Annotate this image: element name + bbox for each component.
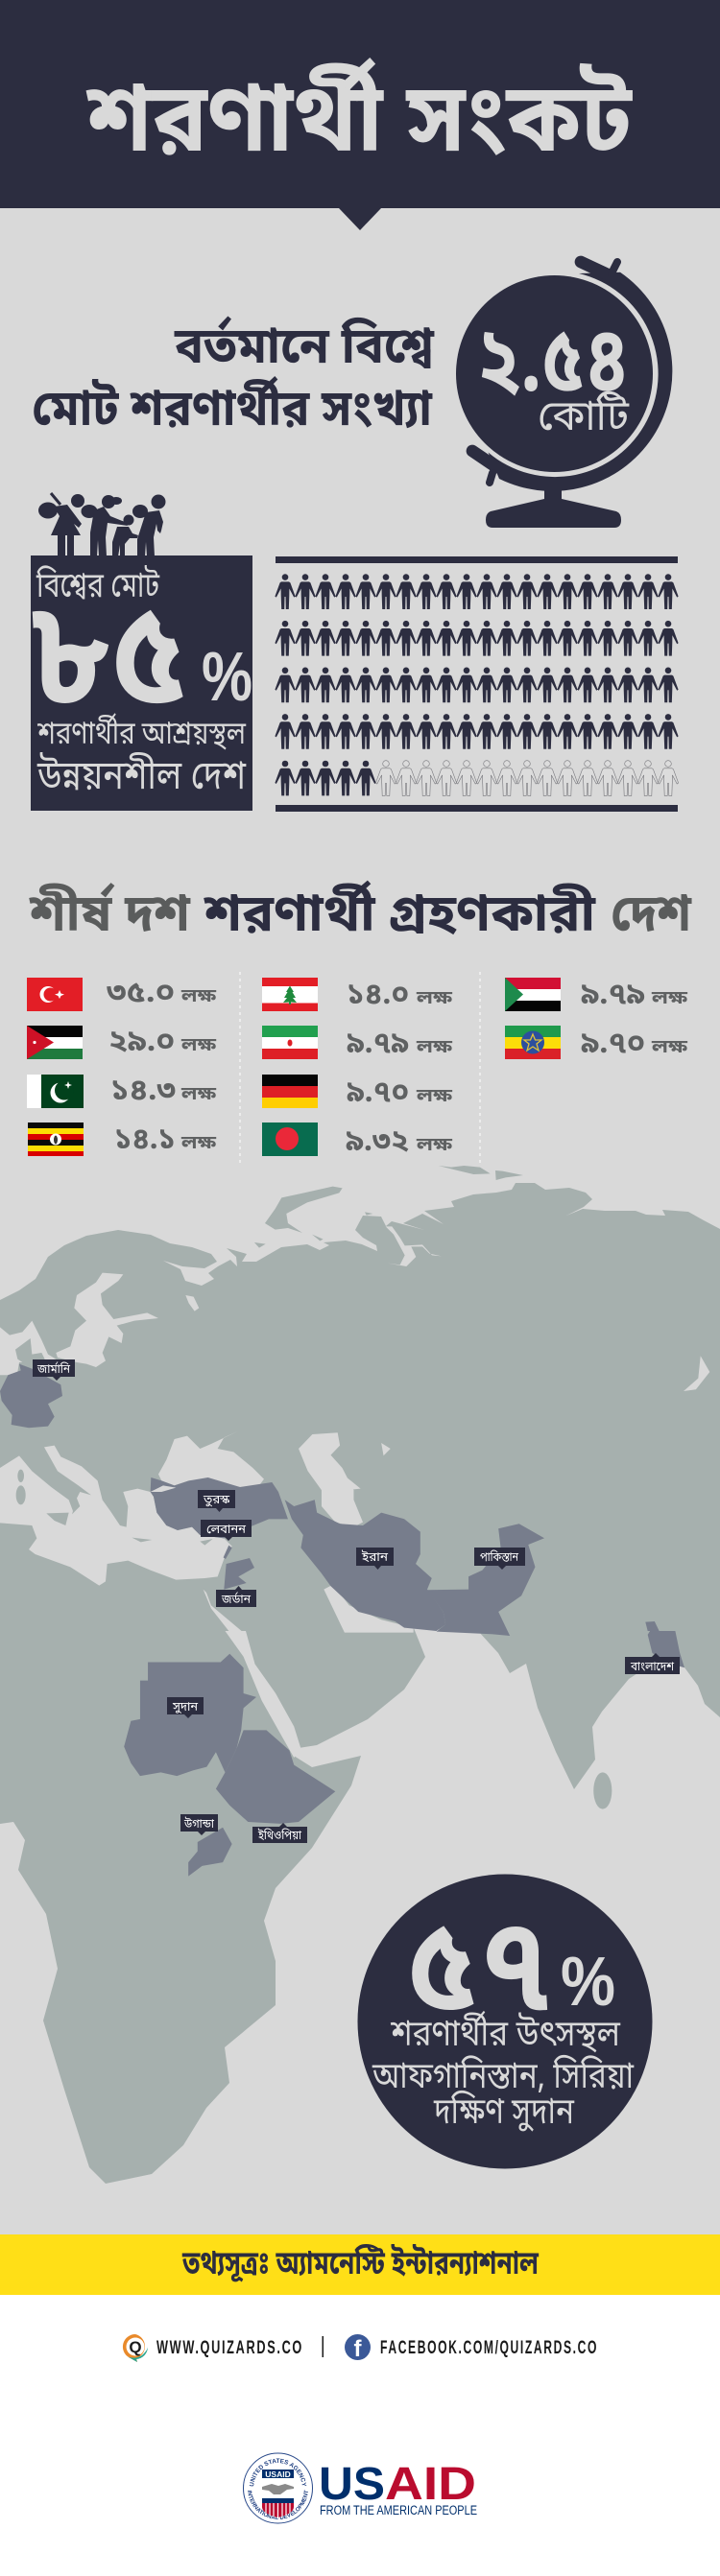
map label: Ethiopia [252, 1823, 307, 1845]
total figure: ২.৫৪ [477, 307, 629, 429]
USAID seal [243, 2452, 313, 2523]
flag: Ethiopia [505, 1026, 561, 1059]
map label: Iran: ইরান [361, 1549, 388, 1567]
facebook address: FACEBOOK.COM/QUIZARDS.CO [380, 2338, 598, 2358]
icon: Quizards logo [123, 2334, 148, 2362]
value: Turkey: ৩৫.০ [107, 975, 175, 1014]
value: Jordan: ২৯.০ [108, 1024, 175, 1063]
icon: Facebook [345, 2334, 371, 2362]
map label: Jordan: জর্ডান [221, 1592, 251, 1609]
map label: Pakistan [474, 1548, 525, 1570]
map label: Jordan [216, 1586, 256, 1609]
value: Turkey [107, 975, 217, 1014]
flag: Uganda [28, 1123, 84, 1156]
flag: Germany [262, 1075, 318, 1108]
value: Ethiopia [581, 1026, 688, 1065]
headline: total refugees: মোট শরণার্থীর সংখ্যা [32, 376, 433, 446]
icon: Facebook: f [353, 2336, 363, 2362]
source band [0, 2234, 720, 2295]
icon: Quizards logo: Q [129, 2338, 142, 2356]
value: Germany: ৯.৭০ [347, 1075, 409, 1114]
flag: Iran [262, 1026, 318, 1059]
pictogram row 5: outlined [375, 761, 679, 795]
map label: Germany: জার্মানি [36, 1361, 70, 1379]
USAID wordmark: AID [385, 2459, 476, 2510]
callout: 57 percent [357, 1875, 653, 2168]
value: Sudan: লক্ষ [651, 987, 688, 1011]
flag: Lebanon [262, 978, 318, 1011]
headline: total refugees [32, 317, 435, 446]
value: Germany: লক্ষ [416, 1085, 453, 1109]
value: Turkey: লক্ষ [180, 985, 217, 1009]
icon: refugee family [38, 493, 165, 556]
value: Iran: লক্ষ [416, 1036, 453, 1060]
map label: Bangladesh [625, 1653, 680, 1676]
map: Arctic islands east [365, 1166, 523, 1216]
value: Lebanon: ১৪.০ [347, 977, 409, 1016]
map label: Turkey: তুরস্ক [203, 1493, 230, 1509]
map: Baltic and North seas [0, 1273, 199, 1375]
header banner [0, 0, 720, 230]
map label: Germany [33, 1359, 75, 1381]
value: Pakistan: ১৪.৩ [110, 1073, 176, 1112]
value: Pakistan [110, 1073, 217, 1112]
pictogram row 1 [275, 574, 679, 609]
map label: Lebanon: লেবানন [206, 1523, 246, 1539]
value: Jordan [108, 1024, 217, 1063]
heading: top ten host countries: দেশ [611, 884, 692, 953]
map: Eurasia and Africa [0, 1166, 720, 2184]
pictogram row 2 [275, 621, 679, 656]
map: inland lakes [299, 1356, 709, 1633]
map label: Uganda [180, 1814, 218, 1835]
USAID seal: INTERNATIONAL DEVELOPMENT [248, 2490, 308, 2519]
icon: globe with total [456, 262, 672, 528]
icon: globe with total: কোটি [538, 390, 630, 447]
value: Iran [347, 1026, 453, 1065]
map: Mediterranean and Black seas [0, 1431, 264, 1631]
callout percent: % [561, 1944, 615, 2021]
heading: top ten host countries: শীর্ষ দশ [29, 883, 191, 953]
map label: Iran [356, 1548, 394, 1570]
map label: Sudan: সুদান [172, 1700, 198, 1716]
map label: Pakistan: পাকিস্তান [480, 1549, 518, 1567]
big figure: ৮৫ [32, 571, 188, 762]
title: শরণার্থী সংকট [85, 58, 633, 190]
map: Red Sea and Sri Lanka [225, 1631, 612, 1809]
value: Bangladesh: ৯.৩২ [346, 1123, 409, 1163]
headline: total refugees: বর্তমানে বিশ্বে [174, 317, 435, 384]
USAID seal: USAID [265, 2470, 291, 2479]
map label: Turkey [198, 1490, 235, 1512]
callout text: আফগানিস্তান, সিরিয়া [372, 2054, 635, 2103]
value: Sudan: ৯.৭৯ [581, 977, 645, 1016]
source band: তথ্যসূত্রঃ অ্যামনেস্টি ইন্টারন্যাশনাল [181, 2243, 540, 2287]
map: Turkey, Jordan, Lebanon [151, 1477, 288, 1590]
callout text: দক্ষিণ সুদান [433, 2090, 575, 2139]
callout figure: ৫৭ [406, 1891, 551, 2063]
pictogram row 5: filled [275, 761, 376, 795]
value: Lebanon [347, 977, 453, 1016]
percent sign: % [202, 639, 252, 716]
flag: Sudan [505, 978, 561, 1011]
flag: Turkey [27, 978, 83, 1011]
value: Germany [347, 1075, 453, 1114]
map label: Uganda: উগান্ডা [183, 1816, 214, 1833]
USAID wordmark [319, 2459, 477, 2517]
website: WWW.QUIZARDS.CO [156, 2338, 303, 2358]
USAID wordmark: US [319, 2459, 385, 2510]
value: Uganda: ১৪.১ [114, 1122, 176, 1161]
pictogram row 4 [275, 714, 679, 749]
value: Pakistan: লক্ষ [180, 1083, 217, 1107]
flag: Jordan [27, 1026, 83, 1059]
value: Ethiopia: ৯.৭০ [581, 1026, 645, 1065]
flag: Bangladesh [262, 1123, 318, 1156]
value: Uganda [114, 1122, 217, 1161]
callout text: শরণার্থীর উৎসস্থল [390, 2010, 621, 2061]
value: Iran: ৯.৭৯ [347, 1026, 409, 1065]
value: Ethiopia: লক্ষ [651, 1036, 688, 1060]
flag: Pakistan [27, 1075, 84, 1108]
value: Uganda: লক্ষ [180, 1132, 217, 1156]
panel: 85 percent: উন্নয়নশীল দেশ [36, 752, 247, 806]
heading: top ten host countries [29, 880, 692, 953]
USAID wordmark: FROM THE AMERICAN PEOPLE [320, 2503, 477, 2517]
value: Sudan [581, 977, 688, 1016]
panel text: share of refugees: বিশ্বের মোট [36, 564, 160, 611]
map: Arctic islands west [254, 1187, 343, 1248]
value: Bangladesh [346, 1123, 453, 1163]
map: Iran, Pakistan, Bangladesh north [285, 1500, 660, 1636]
callout text [372, 2010, 635, 2139]
map label: Bangladesh: বাংলাদেশ [630, 1660, 674, 1676]
pictogram: 85 of 100 people [275, 556, 679, 812]
USAID seal: UNITED STATES AGENCY [250, 2458, 307, 2487]
map label: Sudan [167, 1697, 204, 1718]
map: Germany [0, 1364, 62, 1428]
value: Lebanon: লক্ষ [416, 987, 453, 1011]
panel text: host countries: শরণার্থীর আশ্রয়স্থল [36, 713, 247, 757]
panel: 85 percent [31, 555, 252, 811]
map label: Lebanon [201, 1520, 252, 1541]
map: Sudan, Ethiopia, Uganda, Bangladesh south [124, 1631, 684, 1877]
map: Ob gulf [386, 1226, 442, 1266]
heading: top ten host countries: শরণার্থী গ্রহণকারী [204, 880, 596, 953]
value: Bangladesh: লক্ষ [416, 1134, 453, 1158]
map label: Ethiopia: ইথিওপিয়া [257, 1828, 301, 1845]
pictogram row 3 [275, 668, 679, 702]
value: Jordan: লক্ষ [180, 1034, 217, 1058]
